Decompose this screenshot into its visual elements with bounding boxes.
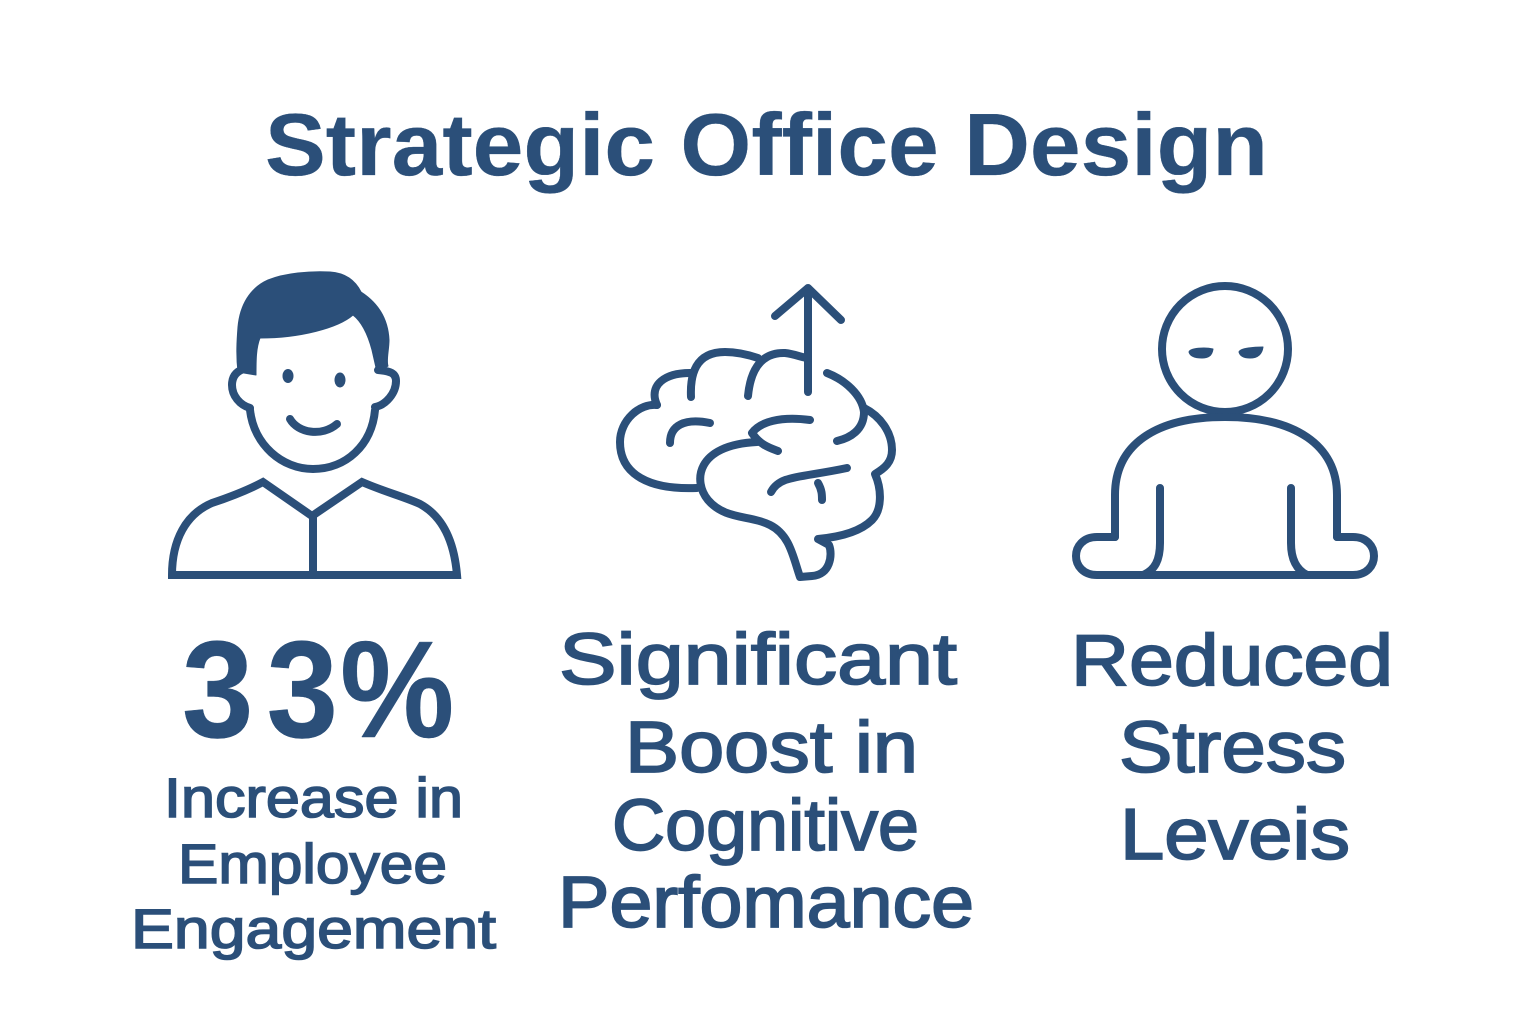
icon: meditating figure	[1076, 286, 1374, 575]
text: significant boost in cognitive performance: Significant	[559, 620, 957, 700]
text: reduced stress levels: Leveis	[1120, 795, 1350, 875]
icon: brain with up arrow	[620, 288, 892, 577]
text: significant boost in cognitive performance: Boost in	[625, 708, 918, 788]
text: significant boost in cognitive performance: Perfomance	[558, 863, 974, 943]
text: increase in employee engagement: Engagement	[131, 897, 496, 960]
column: reduced stress	[1071, 286, 1393, 875]
text: increase in employee engagement: Increase in	[164, 766, 463, 829]
text: increase in employee engagement	[131, 766, 496, 960]
column: employee engagement	[131, 272, 496, 960]
text: significant boost in cognitive performance: Cognitive	[612, 786, 919, 866]
text: increase in employee engagement: Employee	[178, 832, 447, 895]
icon: smiling person	[172, 272, 457, 575]
text: significant boost in cognitive performance	[558, 620, 974, 943]
stat: 33%: 33%	[182, 613, 454, 767]
column: cognitive performance	[558, 288, 974, 943]
text: reduced stress levels	[1071, 621, 1393, 875]
text: reduced stress levels: Reduced	[1071, 621, 1393, 701]
text: reduced stress levels: Stress	[1119, 708, 1346, 788]
title: Strategic Office Design	[265, 95, 1268, 194]
